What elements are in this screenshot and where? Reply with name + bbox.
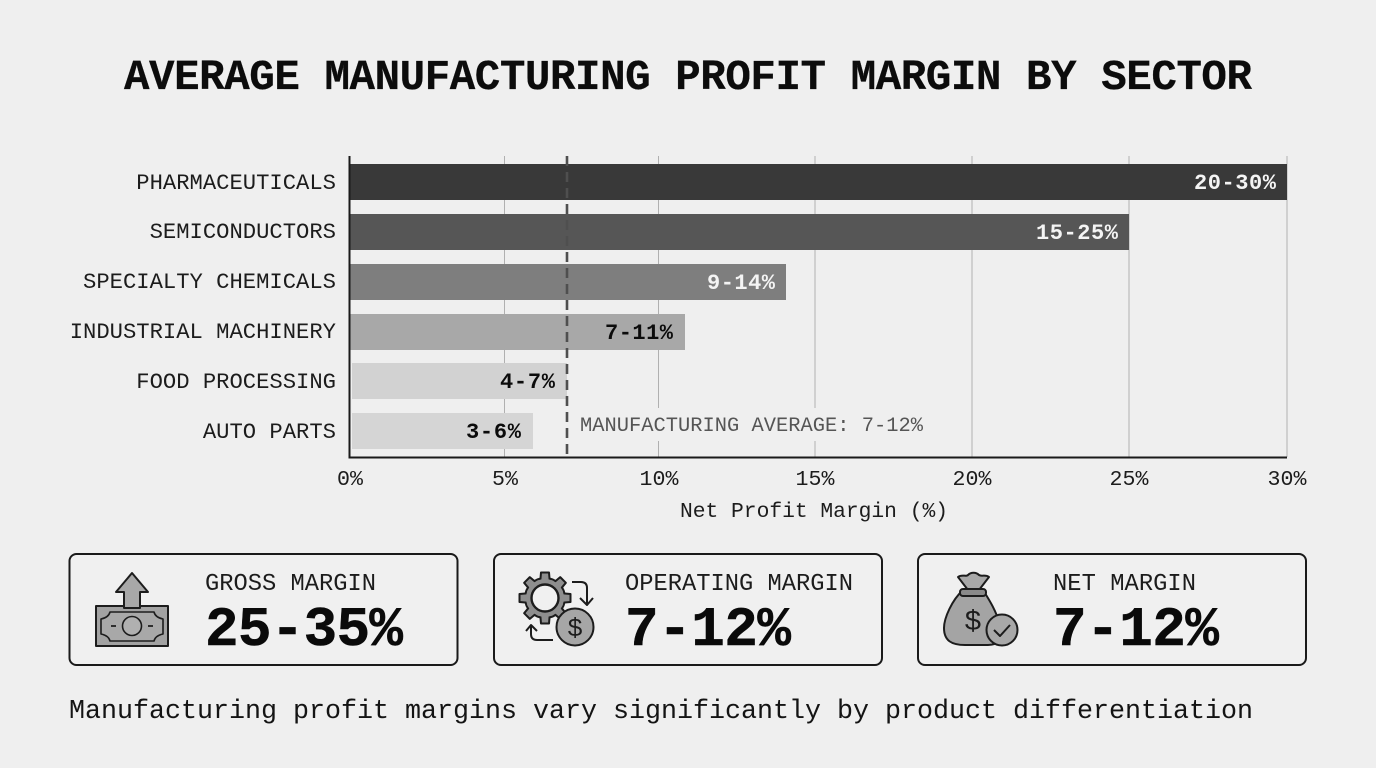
x axis tick labels: 10% — [640, 468, 678, 492]
category labels: INDUSTRIAL MACHINERY — [70, 320, 336, 345]
bar: pharmaceuticals — [350, 164, 1287, 200]
bar: industrial machinery: 7-11% — [605, 321, 674, 346]
value: 7-12% — [1053, 598, 1219, 662]
bar: semiconductors: 15-25% — [1036, 221, 1119, 246]
label: GROSS MARGIN — [205, 571, 376, 598]
x axis tick labels: 25% — [1110, 468, 1148, 492]
average dashed line — [566, 156, 568, 457]
bar: auto parts: 3-6% — [466, 420, 522, 445]
bar: pharmaceuticals: 20-30% — [1194, 171, 1277, 196]
panel: operating margin — [494, 554, 882, 665]
category labels: SPECIALTY CHEMICALS — [83, 270, 336, 295]
bar: food processing: 4-7% — [500, 370, 556, 395]
value: 7-12% — [625, 598, 791, 662]
bar: specialty chemicals: 9-14% — [707, 271, 776, 296]
label: OPERATING MARGIN — [625, 571, 853, 598]
bar: auto parts — [352, 413, 533, 449]
icon: gear and coin — [520, 572, 594, 646]
x axis title: Net Profit Margin (%) — [680, 500, 948, 524]
title: AVERAGE MANUFACTURING PROFIT MARGIN BY SECTOR — [124, 54, 1252, 102]
bar: food processing — [352, 363, 567, 399]
x axis tick labels — [337, 468, 1306, 492]
bar: specialty chemicals — [350, 264, 786, 300]
category labels: FOOD PROCESSING — [136, 370, 336, 395]
axes — [350, 156, 1287, 458]
label: NET MARGIN — [1053, 571, 1196, 598]
x axis tick labels: 0% — [337, 468, 363, 492]
bar: industrial machinery — [350, 314, 685, 350]
category labels: AUTO PARTS — [203, 420, 336, 445]
icon: money bag with check — [944, 573, 1018, 646]
x axis tick labels: 30% — [1268, 468, 1306, 492]
panel: gross margin — [70, 554, 458, 665]
category labels — [70, 171, 336, 445]
icon glyph: dollar: $ — [964, 606, 982, 639]
x axis tick labels: 5% — [492, 468, 518, 492]
average label: MANUFACTURING AVERAGE: 7-12% — [580, 415, 924, 438]
icon glyph: dollar: $ — [567, 614, 583, 644]
bar: semiconductors — [350, 214, 1129, 250]
x axis tick labels: 15% — [796, 468, 834, 492]
category labels: PHARMACEUTICALS — [136, 171, 336, 196]
footer takeaway: Manufacturing profit margins vary significantly by product differentiation — [69, 697, 1253, 727]
icon: cash with up arrow — [96, 573, 168, 646]
panel: net margin — [918, 554, 1306, 665]
value: 25-35% — [205, 598, 403, 662]
bar chart — [70, 156, 1306, 524]
x axis tick labels: 20% — [953, 468, 991, 492]
category labels: SEMICONDUCTORS — [150, 220, 336, 245]
